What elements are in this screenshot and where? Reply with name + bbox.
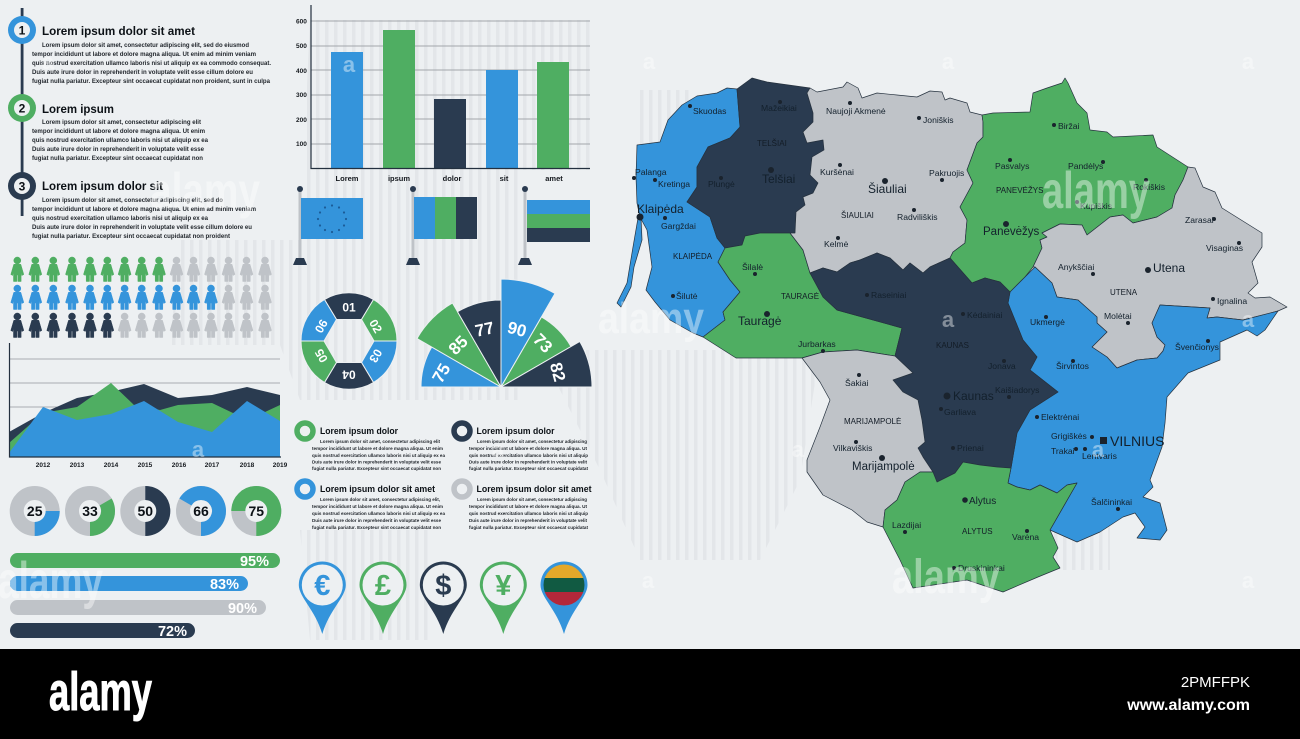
fan chart: 82: [546, 361, 569, 384]
pin: yen: ¥: [495, 570, 511, 602]
map labels: VILNIUS: [1110, 433, 1164, 449]
county names: PANEVĖŽYS: [996, 186, 1043, 195]
county names: KAUNAS: [936, 341, 969, 350]
map labels: Ukmergė: [1030, 317, 1065, 327]
area chart years: 2016: [172, 462, 187, 469]
step 3 text: Lorem ipsum dolor sit amet, consectetur adipiscing elit, sed do: [42, 197, 223, 204]
region: Alytus: [883, 462, 1077, 592]
legend item: gray: fugiat nulla pariatur. Excepteur sint occaecat cupidatat: [469, 525, 588, 531]
map labels: Druskininkai: [958, 563, 1005, 573]
legend item: green: quis nostrud exercitation ullamco laboris nisi ut aliquip ex ea: [312, 453, 445, 459]
progress bars: 72%: [158, 624, 187, 640]
watermarks: alamy: [150, 163, 260, 219]
watermarks: a: [942, 307, 955, 332]
watermarks: a: [492, 437, 505, 462]
county names: TELŠIAI: [757, 139, 787, 148]
donut charts: [17, 493, 274, 529]
legend item: dark: Duis aute irure dolor in reprehenderit in voluptate velit: [469, 460, 587, 466]
map labels: Skuodas: [693, 106, 726, 116]
map labels: Jonava: [988, 361, 1016, 371]
hexagon ring chart: 04: [342, 368, 356, 382]
map labels: Tauragė: [738, 314, 782, 328]
map labels: Garliava: [944, 407, 976, 417]
county names: ALYTUS: [962, 527, 993, 536]
fan chart: 77: [473, 318, 496, 341]
watermarks: alamy: [598, 294, 704, 343]
county names: KLAIPĖDA: [673, 252, 713, 261]
watermarks: a: [1242, 568, 1255, 593]
hexagon ring chart: 06: [312, 317, 331, 336]
step 2 text: [32, 102, 208, 162]
progress bars: 83%: [210, 577, 239, 593]
map labels: Šilutė: [676, 291, 698, 301]
hexagon ring chart: 01: [342, 300, 356, 314]
step 3 text: tempor incididunt ut labore et dolore magna aliqua. Ut enim ad minim veniam: [32, 206, 256, 213]
area chart years: [36, 462, 288, 469]
step 3 text: Lorem ipsum dolor sit: [42, 179, 163, 193]
bar chart axis labels: 100: [296, 141, 307, 148]
progress bars: 90%: [228, 601, 257, 617]
legend item: dark: quis nostrud exercitation ullamco laboris nisi ut aliquip: [469, 453, 588, 459]
map labels: Švenčionys: [1175, 342, 1219, 352]
step 2 marker: [8, 94, 36, 122]
legend item: blue: Lorem ipsum dolor sit amet: [320, 484, 435, 494]
map labels: Utena: [1153, 261, 1185, 275]
watermarks: a: [192, 437, 205, 462]
hexagon ring chart: 03: [366, 346, 385, 365]
donut charts: 33: [82, 503, 98, 519]
map labels: [632, 100, 1247, 573]
watermarks: [0, 49, 1255, 610]
bar chart axis labels: 200: [296, 117, 307, 124]
timeline: [8, 8, 36, 216]
step 1 text: [32, 24, 271, 85]
region: Vilnius: [1008, 267, 1278, 542]
map labels: Lentvaris: [1082, 451, 1117, 461]
step 3 text: fugiat nulla pariatur. Excepteur sint occaecat cupidatat non proident: [32, 233, 231, 240]
map labels: Prienai: [957, 443, 984, 453]
map labels: Kaišiadorys: [995, 385, 1039, 395]
legend item: gray: Duis aute irure dolor in reprehenderit in voluptate velit: [469, 518, 587, 524]
map labels: Kaunas: [953, 389, 994, 403]
legend item: blue: Lorem ipsum dolor sit amet, consectetur adipiscing elit,: [320, 497, 441, 503]
region: Marijampole: [802, 350, 933, 527]
area chart years: 2018: [240, 462, 255, 469]
map labels: Joniškis: [923, 115, 954, 125]
footer bar: [0, 649, 1300, 739]
bar chart axis labels: [296, 18, 563, 183]
hexagon ring chart: 05: [312, 346, 331, 365]
map labels: Molėtai: [1104, 311, 1132, 321]
legend item: gray: Lorem ipsum dolor sit amet: [476, 484, 592, 494]
flag: EU: [293, 186, 363, 265]
step 3 text: Duis aute irure dolor in reprehenderit in voluptate velit esse cillum dolore eu: [32, 224, 252, 231]
legend item: gray: [454, 481, 592, 531]
pin: yen: [480, 561, 527, 634]
map labels: Pakruojis: [929, 168, 964, 178]
map labels: Klaipėda: [637, 202, 684, 216]
step 2 text: Lorem ipsum dolor sit amet, consectetur adipiscing elit: [42, 119, 202, 126]
step 3 marker: [8, 172, 36, 200]
map labels: Šiauliai: [868, 181, 907, 196]
fan chart: 85: [445, 332, 472, 359]
fan chart: 75: [428, 360, 454, 386]
watermarks: a: [643, 49, 656, 74]
bar chart axis labels: dolor: [443, 174, 461, 183]
map labels: Trakai: [1051, 446, 1075, 456]
region: Panevezys: [950, 78, 1188, 292]
watermarks: a: [792, 437, 805, 462]
county names: UTENA: [1110, 288, 1138, 297]
bar chart axis labels: 500: [296, 43, 307, 50]
watermarks: a: [343, 52, 356, 77]
step 3 text: quis nostrud exercitation ullamco laboris nisi ut aliquip ex ea: [32, 215, 208, 222]
pin: euro: €: [314, 570, 330, 602]
legend item: gray: tempor incididunt ut labore et dolore magna aliqua. Ut: [469, 504, 587, 510]
map labels: Naujoji Akmenė: [826, 106, 886, 116]
area chart years: 2019: [273, 462, 288, 469]
legend item: blue: fugiat nulla pariatur. Excepteur sint occaecat cupidatat non: [312, 525, 441, 531]
pin: pound: £: [375, 570, 391, 602]
region: Siauliai: [790, 82, 983, 273]
area chart years: 2015: [138, 462, 153, 469]
map labels: Anykščiai: [1058, 262, 1094, 272]
map labels: Šakiai: [845, 378, 868, 388]
legend item: dark: [454, 423, 588, 472]
step 2 text: Duis aute irure dolor in reprehenderit in voluptate velit esse: [32, 146, 204, 153]
map labels: Pasvalys: [995, 161, 1029, 171]
legend item: green: Duis aute irure dolor in reprehenderit in voluptate velit esse: [312, 460, 441, 466]
pin: dollar: [420, 561, 467, 634]
step 2 text: tempor incididunt ut labore et dolore magna aliqua. Ut enim: [32, 128, 205, 135]
map labels: Širvintos: [1056, 361, 1089, 371]
legend item: gray: Lorem ipsum dolor sit amet, consectetur adipiscing: [477, 497, 587, 503]
bar chart axis labels: 400: [296, 68, 307, 75]
map labels: Mažeikiai: [761, 103, 797, 113]
map of Lithuania: [617, 78, 1287, 592]
progress bars: [10, 553, 280, 640]
step 1 text: Lorem ipsum dolor sit amet: [42, 24, 195, 38]
legend item: dark: Lorem ipsum dolor sit amet, consectetur adipiscing: [477, 439, 587, 445]
map labels: Plungė: [708, 179, 735, 189]
bar chart axis labels: ipsum: [388, 174, 410, 183]
watermarks: alamy: [0, 552, 103, 610]
hexagon ring chart: 02: [366, 317, 385, 336]
area chart years: 2017: [205, 462, 220, 469]
step 2 text: Lorem ipsum: [42, 102, 114, 116]
watermarks: a: [642, 568, 655, 593]
legend item: dark: fugiat nulla pariatur. Excepteur sint occaecat cupidatat: [469, 466, 588, 472]
region: Telsiai: [687, 78, 824, 248]
map labels: Jurbarkas: [798, 339, 836, 349]
step 2 text: fugiat nulla pariatur. Excepteur sint occaecat cupidatat non: [32, 155, 203, 162]
step 1 marker: [8, 16, 36, 44]
area chart: [9, 343, 288, 469]
bar chart: [296, 5, 590, 183]
donut charts: 75: [249, 503, 264, 519]
map labels: Šilalė: [742, 262, 763, 272]
map labels: Biržai: [1058, 121, 1080, 131]
bar chart axis labels: amet: [545, 174, 563, 183]
pin: pound: [360, 561, 406, 634]
legend item: blue: tempor incididunt ut labore et dolore magna aliqua. Ut enim: [312, 504, 444, 510]
county names: TAURAGĖ: [781, 292, 819, 301]
area chart years: 2012: [36, 462, 51, 469]
step 1 text: tempor incididunt ut labore et dolore magna aliqua. Ut enim ad minim veniam: [32, 51, 256, 58]
flag: horizontal tricolour: [518, 186, 590, 265]
legend item: dark: tempor incididunt ut labore et dolore magna aliqua. Ut: [469, 446, 587, 452]
watermarks: a: [942, 49, 955, 74]
pin: dollar: $: [435, 570, 451, 602]
map labels: Gargždai: [661, 221, 696, 231]
map labels: Šalčininkai: [1091, 497, 1132, 507]
area chart years: 2014: [104, 462, 119, 469]
fan chart: 90: [505, 318, 528, 341]
region: Kaunas: [810, 253, 1058, 482]
step 2 marker: 2: [19, 102, 26, 116]
step 1 text: Duis aute irure dolor in reprehenderit in voluptate velit esse cillum dolore eu: [32, 69, 253, 76]
bar chart axis labels: 300: [296, 92, 307, 99]
map labels: Marijampolė: [852, 461, 915, 473]
people pictogram: [11, 257, 272, 338]
step 1 text: quis nostrud exercitation ullamco laboris nisi ut aliquip ex ea commodo consequat.: [32, 60, 271, 67]
image id: 2PMFFPK: [1181, 674, 1250, 691]
hexagon ring chart: [301, 293, 397, 389]
region: Utena: [1033, 167, 1287, 368]
map labels: Raseiniai: [871, 290, 906, 300]
region: Taurage: [703, 233, 902, 358]
pin: Lithuania flag: [540, 561, 588, 634]
region: Klaipeda: [617, 88, 740, 337]
county names: MARIJAMPOLĖ: [844, 417, 901, 426]
map labels: Vilkaviškis: [833, 443, 872, 453]
legend item: green: fugiat nulla pariatur. Excepteur sint occaecat cupidatat non: [312, 466, 441, 472]
map labels: Rokiškis: [1133, 182, 1165, 192]
city dots: [632, 100, 1241, 570]
map labels: Alytus: [969, 496, 996, 507]
legend item: green: Lorem ipsum dolor: [320, 426, 398, 436]
flag: vertical tricolour: [406, 186, 477, 265]
bar chart axis labels: 600: [296, 18, 307, 26]
area chart years: 2013: [70, 462, 85, 469]
map labels: Kuršėnai: [820, 167, 854, 177]
watermarks: a: [1242, 49, 1255, 74]
footer logo: alamy: [49, 662, 152, 722]
watermarks: a: [1242, 307, 1255, 332]
legend item: green: Lorem ipsum dolor sit amet, consectetur adipiscing elit: [320, 439, 440, 445]
map labels: Telšiai: [762, 172, 795, 186]
map labels: Panevėžys: [983, 226, 1040, 238]
watermarks: alamy: [1042, 162, 1150, 220]
step 3 marker: 3: [19, 180, 26, 194]
map labels: Elektrėnai: [1041, 412, 1079, 422]
legend item: green: [297, 423, 445, 472]
step 1 text: Lorem ipsum dolor sit amet, consectetur adipiscing elit, sed do eiusmod: [42, 42, 249, 49]
map labels: Visaginas: [1206, 243, 1243, 253]
fan chart: 73: [529, 330, 556, 357]
map labels: Kupiškis: [1080, 201, 1112, 211]
legend item: green: tempor incididunt ut labore et dolore magna aliqua. Ut enim: [312, 446, 444, 452]
pin: euro: [299, 561, 346, 634]
fan chart: [417, 279, 592, 387]
legend item: gray: quis nostrud exercitation ullamco laboris nisi ut aliquip: [469, 511, 588, 517]
map labels: Lazdijai: [892, 520, 921, 530]
watermarks: a: [42, 49, 55, 74]
legend item: blue: [297, 481, 445, 531]
footer url: www.alamy.com: [1126, 697, 1250, 714]
progress bars: 95%: [240, 554, 269, 570]
bar chart axis labels: sit: [500, 174, 509, 183]
legend item: blue: Duis aute irure dolor in reprehenderit in voluptate velit esse: [312, 518, 441, 524]
map labels: Pandėlys: [1068, 161, 1103, 171]
step 1 marker: 1: [19, 24, 26, 38]
county names: ŠIAULIAI: [841, 211, 874, 220]
watermarks: a: [1092, 437, 1105, 462]
map labels: Zarasai: [1185, 215, 1214, 225]
map labels: Kėdainiai: [967, 310, 1002, 320]
watermarks: alamy: [892, 551, 1000, 604]
map labels: Varėna: [1012, 532, 1039, 542]
map labels: Kretinga: [658, 179, 690, 189]
step 3 text: [32, 179, 256, 240]
step 1 text: fugiat nulla pariatur. Excepteur sint occaecat cupidatat non proident, sunt in culpa: [32, 78, 270, 85]
legend item: blue: quis nostrud exercitation ullamco laboris nisi ut aliquip ex ea: [312, 511, 445, 517]
map labels: Palanga: [635, 167, 667, 177]
legend item: dark: Lorem ipsum dolor: [476, 426, 555, 436]
map labels: Grigiškės: [1051, 431, 1087, 441]
donut charts: 50: [138, 503, 153, 519]
county names: [673, 139, 1138, 536]
map labels: Radviliškis: [897, 212, 938, 222]
map labels: Kelmė: [824, 239, 849, 249]
donut charts: 25: [27, 503, 43, 519]
map labels: Ignalina: [1217, 296, 1247, 306]
bar chart axis labels: Lorem: [336, 174, 359, 183]
step 2 text: quis nostrud exercitation ullamco laboris nisi ut aliquip ex ea: [32, 137, 208, 144]
donut charts: 66: [193, 503, 209, 519]
